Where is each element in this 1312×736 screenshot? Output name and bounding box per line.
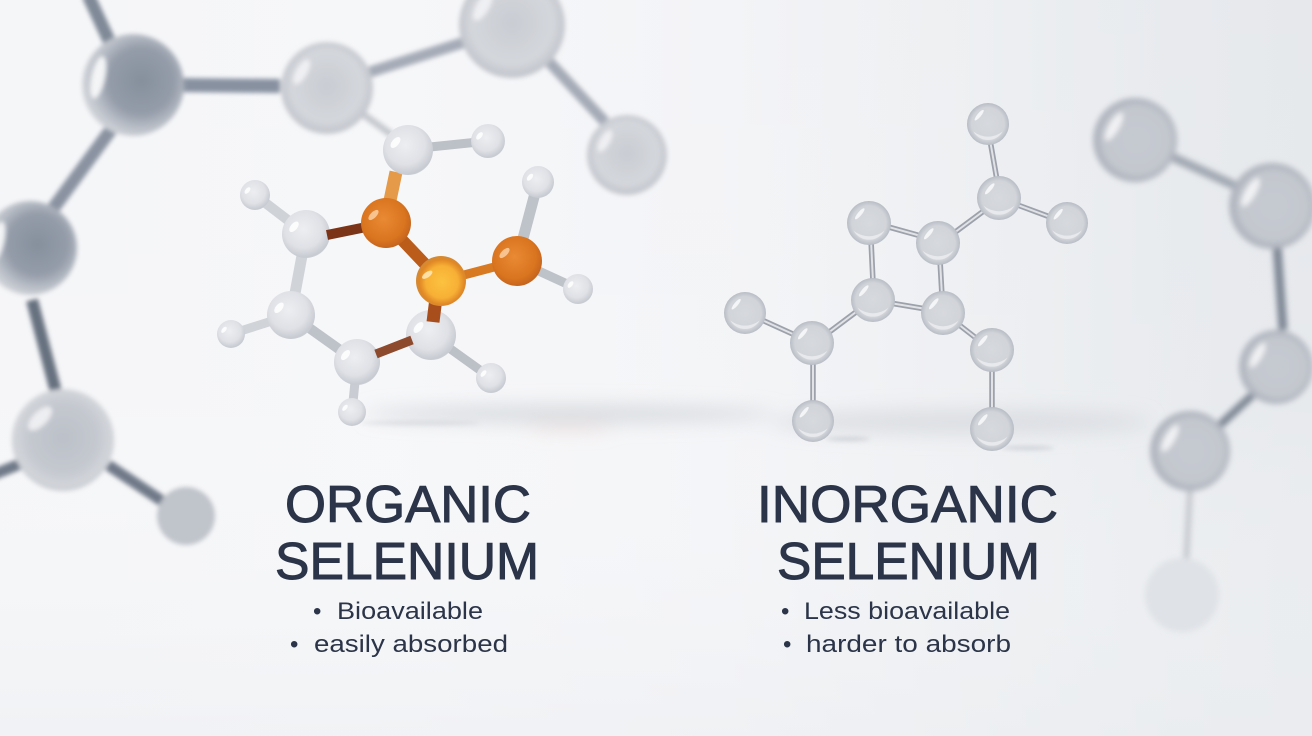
bonds: organic: [231, 141, 578, 412]
heading: inorganic selenium: INORGANIC: [757, 476, 1058, 534]
heading: inorganic selenium: [757, 476, 1058, 591]
text block: organic properties: •: [313, 598, 321, 625]
blurred molecule: right background: [1093, 98, 1312, 632]
text block: inorganic properties: •: [781, 598, 789, 625]
text block: inorganic properties: Less bioavailable: [804, 598, 1010, 625]
floor shadow: [360, 405, 1150, 450]
molecule: organic selenium: [217, 124, 593, 426]
heading: organic selenium: [275, 476, 539, 591]
heading: organic selenium: SELENIUM: [275, 533, 539, 591]
heading: inorganic selenium: SELENIUM: [777, 533, 1040, 591]
atoms: inorganic: [724, 103, 1088, 451]
bonds: inorganic: [762, 140, 1050, 410]
atoms: organic: [217, 124, 593, 426]
text block: organic properties: [290, 598, 508, 658]
text block: inorganic properties: [781, 598, 1011, 658]
text block: inorganic properties: •: [783, 631, 791, 658]
heading: organic selenium: ORGANIC: [285, 476, 531, 534]
text block: inorganic properties: harder to absorb: [806, 631, 1011, 658]
molecule: inorganic selenium: [724, 103, 1088, 451]
blurred molecule: top left background: [0, 0, 667, 545]
text block: organic properties: Bioavailable: [337, 598, 483, 625]
text block: organic properties: •: [290, 631, 298, 658]
text block: organic properties: easily absorbed: [314, 631, 508, 658]
